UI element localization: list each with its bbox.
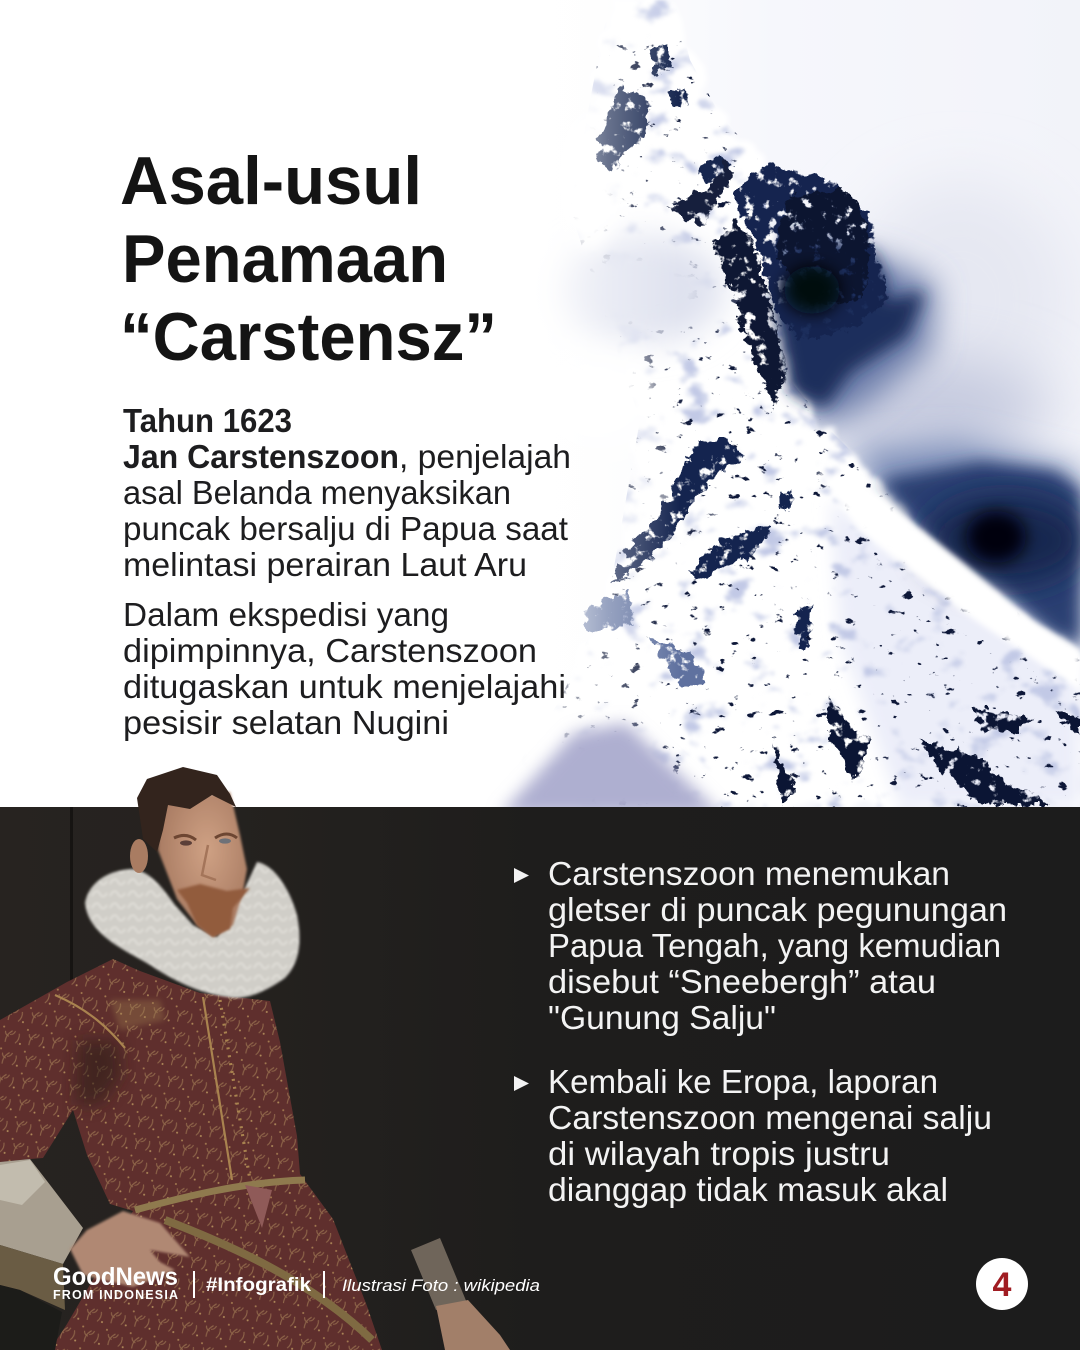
text block: year and discovery: , penjelajah bbox=[399, 438, 571, 475]
page number badge bbox=[976, 1258, 1028, 1310]
bullet: glacier discovery: Papua Tengah, yang kemudian bbox=[548, 927, 1001, 964]
bullet: report to Europe bbox=[514, 1063, 992, 1208]
portrait: ear bbox=[130, 839, 148, 873]
footer: logo and credits: #Infografik bbox=[206, 1275, 311, 1296]
footer: logo and credits: GoodNews bbox=[53, 1263, 178, 1291]
portrait: lace cuff bbox=[0, 1159, 83, 1264]
bullet: glacier discovery: "Gunung Salju" bbox=[548, 999, 776, 1036]
portrait: hand on hip bbox=[70, 1211, 190, 1287]
bullet: report to Europe: di wilayah tropis justru bbox=[548, 1135, 890, 1172]
text block: expedition: ditugaskan untuk menjelajahi bbox=[123, 668, 566, 705]
portrait: second sleeve and hand bbox=[411, 1238, 467, 1310]
bullet: report to Europe: Kembali ke Eropa, laporan bbox=[548, 1063, 938, 1100]
fog: behind lower right slope bbox=[850, 440, 1080, 660]
bullet: glacier discovery: Carstenszoon menemukan bbox=[548, 855, 950, 892]
portrait: ruff collar bbox=[85, 862, 300, 998]
title: Asal-usul bbox=[120, 143, 422, 219]
title: Penamaan bbox=[122, 221, 448, 297]
footer: logo and credits: FROM INDONESIA bbox=[53, 1288, 178, 1302]
text block: year and discovery: melintasi perairan Laut Aru bbox=[123, 546, 527, 583]
text block: expedition: pesisir selatan Nugini bbox=[123, 704, 449, 741]
fog: behind main cliff bbox=[780, 240, 935, 425]
rock: lower streaks bbox=[774, 697, 1080, 806]
portrait of Jan Carstenszoon bbox=[0, 767, 510, 1350]
bullet: glacier discovery: disebut “Sneebergh” atau bbox=[548, 963, 936, 1000]
footer: logo and credits bbox=[53, 1263, 540, 1302]
rock: mid slope dark bands bbox=[581, 439, 812, 687]
text block: expedition: Dalam ekspedisi yang bbox=[123, 596, 449, 633]
text block: year and discovery: puncak bersalju di Papua saat bbox=[123, 510, 568, 547]
portrait: table cloth and dark corner bbox=[0, 1245, 65, 1310]
panel: dark lower band bbox=[0, 807, 1080, 1350]
cloud wash behind text bbox=[522, 44, 673, 760]
portrait: face bbox=[158, 792, 247, 937]
bullet: glacier discovery: gletser di puncak pegunungan bbox=[548, 891, 1007, 928]
bullet: glacier discovery bbox=[514, 855, 1007, 1036]
text block: year and discovery bbox=[123, 402, 571, 583]
haze: lilac foot of the mountain bbox=[500, 723, 722, 815]
text block: year and discovery: Jan Carstenszoon bbox=[123, 438, 399, 475]
rock: upper peak crags bbox=[597, 45, 733, 182]
text block: expedition: dipimpinnya, Carstenszoon bbox=[123, 632, 537, 669]
snow ridge over lower right slope bbox=[815, 470, 1080, 690]
rock: main dark cliff face bbox=[666, 160, 925, 408]
panel: snowy mountain photo background bbox=[498, 0, 1080, 807]
portrait: doublet seams bbox=[55, 995, 250, 1180]
text block: expedition bbox=[123, 596, 566, 741]
portrait: hair bbox=[137, 767, 236, 852]
portrait: belt and sash bbox=[135, 1180, 372, 1340]
portrait: eyes and nose shadow bbox=[174, 834, 237, 880]
title bbox=[120, 143, 497, 375]
portrait: moustache and beard bbox=[177, 884, 250, 937]
text block: year and discovery: asal Belanda menyaksikan bbox=[123, 474, 511, 511]
cloud bands over the ridge bbox=[555, 235, 725, 345]
rock: lower right dark slope bbox=[880, 462, 1080, 646]
text block: year and discovery: Tahun 1623 bbox=[123, 402, 292, 439]
snow mass bbox=[744, 151, 1080, 807]
bullet: report to Europe: dianggap tidak masuk akal bbox=[548, 1171, 948, 1208]
title: “Carstensz” bbox=[120, 299, 497, 375]
texture: snow relief bbox=[520, 0, 1080, 807]
footer: logo and credits: Ilustrasi Foto : wikipedia bbox=[342, 1276, 540, 1295]
bullet: report to Europe: Carstenszoon mengenai salju bbox=[548, 1099, 992, 1136]
page number badge: 4 bbox=[993, 1266, 1012, 1304]
